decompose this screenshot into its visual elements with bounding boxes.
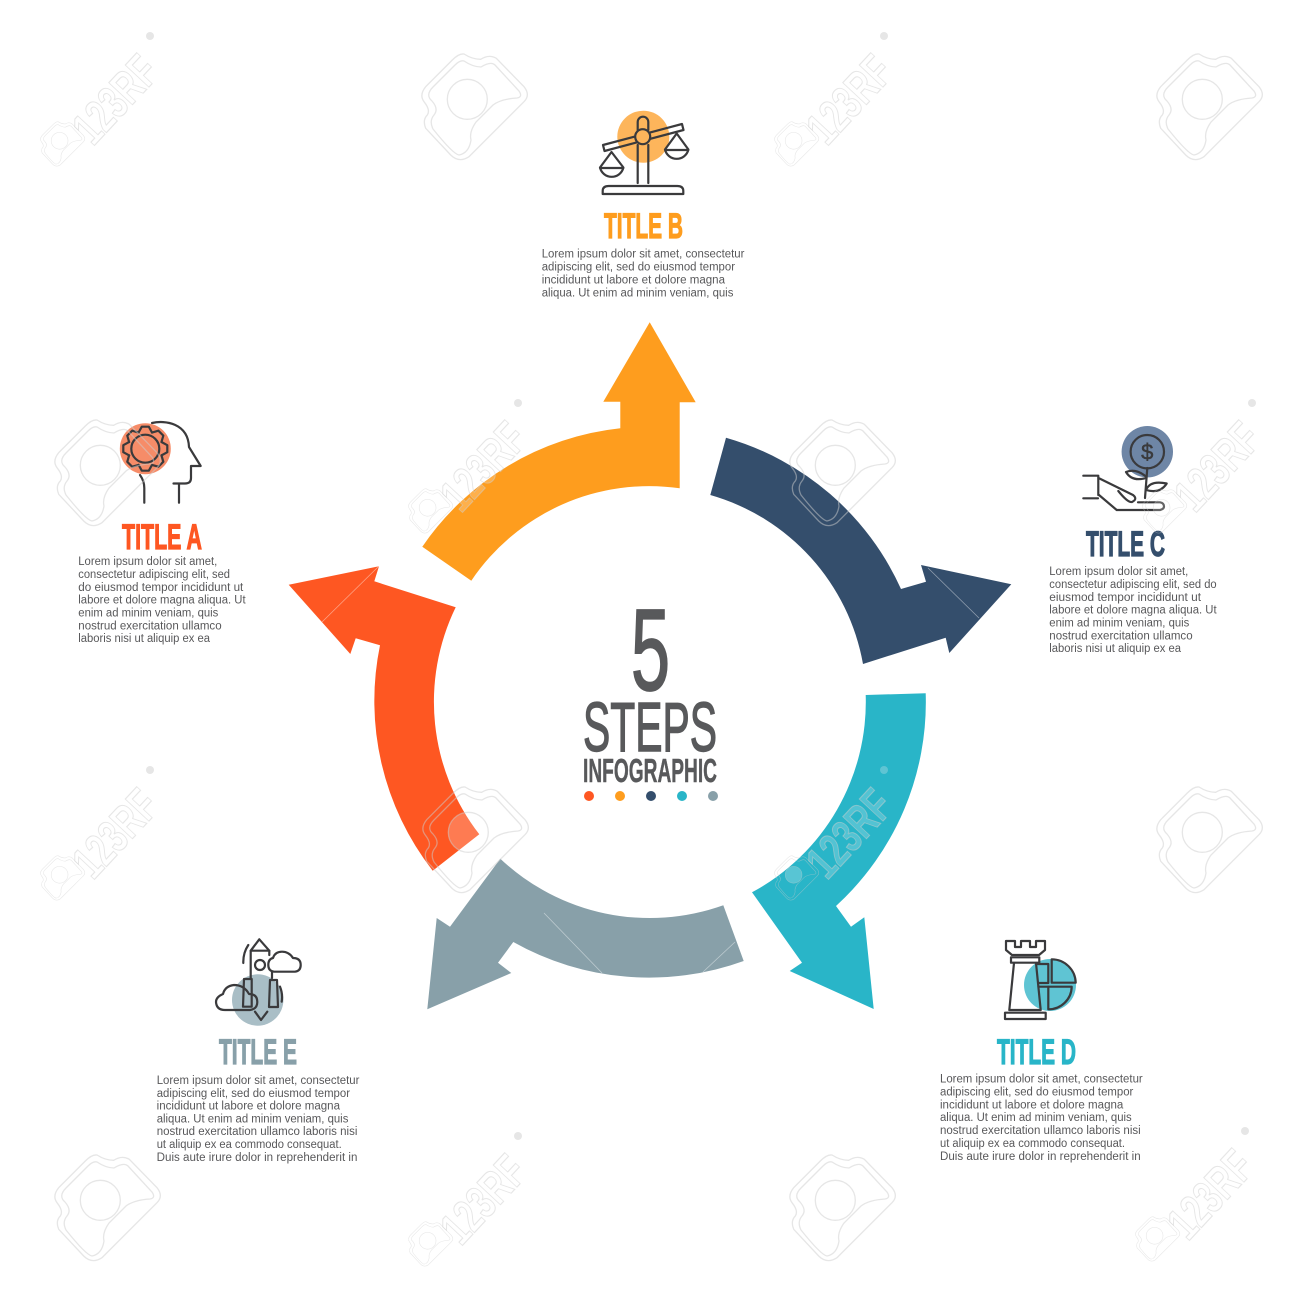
title B: TITLE B [604, 207, 683, 246]
watermark overlay: eggs and 123RF logos: 123RF [62, 779, 169, 888]
watermark overlay: eggs and 123RF logos: 123RF [1164, 412, 1271, 521]
watermark overlay: eggs and 123RF logos: 123RF [62, 45, 169, 154]
text block B: incididunt ut labore et dolore magna [542, 274, 726, 286]
text block A: do eiusmod tempor incididunt ut [78, 582, 244, 594]
text block D: adipiscing elit, sed do eiusmod tempor [940, 1086, 1133, 1098]
icon: chess rook with pie chart [1005, 941, 1076, 1019]
arrow: Title B orange [422, 322, 696, 581]
title E: TITLE E [219, 1033, 297, 1072]
word STEPS: STEPS [583, 688, 717, 766]
icon: head with gear [120, 422, 201, 503]
panel: Title B [542, 111, 745, 300]
icon: hand with coin plant [1083, 426, 1173, 510]
arrow: Title A red [289, 566, 479, 871]
text block A: laboris nisi ut aliquip ex ea [78, 633, 211, 645]
text block E: aliqua. Ut enim ad minim veniam, quis [157, 1113, 349, 1125]
text block C: enim ad minim veniam, quis [1049, 618, 1190, 630]
text block D: ut aliquip ex ea commodo consequat. [940, 1138, 1125, 1150]
text block A: enim ad minim veniam, quis [78, 608, 219, 620]
center heading: 5 steps infographic [583, 585, 717, 789]
text block A: consectetur adipiscing elit, sed [78, 569, 230, 581]
arrow: Title D cyan [752, 693, 926, 1009]
text block E: adipiscing elit, sed do eiusmod tempor [157, 1088, 350, 1100]
watermark overlay: eggs and 123RF logos: 123RF [1157, 1140, 1264, 1249]
text block E: Duis aute irure dolor in reprehenderit in [157, 1152, 357, 1164]
title D: TITLE D [997, 1033, 1076, 1072]
watermark overlay: eggs and 123RF logos: 123RF [796, 779, 903, 888]
word INFOGRAPHIC: INFOGRAPHIC [583, 752, 717, 789]
text block B [542, 248, 745, 300]
title A: TITLE A [122, 518, 202, 557]
text block E: ut aliquip ex ea commodo consequat. [157, 1139, 342, 1151]
text block B: aliqua. Ut enim ad minim veniam, quis [542, 288, 734, 300]
center colour dots [584, 791, 718, 801]
text block A: labore et dolore magna aliqua. Ut [78, 594, 246, 606]
watermark overlay: eggs and 123RF logos: 123RF [430, 412, 537, 521]
watermark overlay: eggs and 123RF logos: 123RF [796, 45, 903, 154]
text block B: Lorem ipsum dolor sit amet, consectetur [542, 248, 745, 260]
icon: scales [600, 111, 688, 194]
text block D: aliqua. Ut enim ad minim veniam, quis [940, 1112, 1132, 1124]
numeral 5: 5 [631, 585, 670, 715]
icon: rocket and clouds [216, 939, 301, 1026]
text block E: nostrud exercitation ullamco laboris nisi [157, 1126, 357, 1138]
text block C: consectetur adipiscing elit, sed do [1049, 579, 1217, 591]
panel: Title D [940, 941, 1143, 1163]
title C: TITLE C [1086, 525, 1165, 564]
text block C [1049, 566, 1217, 655]
text block A: nostrud exercitation ullamco [78, 620, 222, 632]
icon: hand with coin plant: $ [1141, 440, 1153, 464]
text block D: nostrud exercitation ullamco laboris nisi [940, 1125, 1141, 1137]
text block D [940, 1074, 1143, 1163]
text block D: Lorem ipsum dolor sit amet, consectetur [940, 1074, 1143, 1086]
text block D: incididunt ut labore et dolore magna [940, 1099, 1124, 1111]
text block A [78, 556, 246, 645]
text block C: Lorem ipsum dolor sit amet, [1049, 566, 1188, 578]
text block B: adipiscing elit, sed do eiusmod tempor [542, 262, 735, 274]
arrow: Title C navy [710, 438, 1011, 664]
text block C: eiusmod tempor incididunt ut [1049, 592, 1202, 604]
text block C: laboris nisi ut aliquip ex ea [1049, 643, 1182, 655]
text block E: incididunt ut labore et dolore magna [157, 1101, 341, 1113]
text block C: nostrud exercitation ullamco [1049, 630, 1193, 642]
text block A: Lorem ipsum dolor sit amet, [78, 556, 217, 568]
text block E [157, 1075, 360, 1164]
panel: Title C [1049, 426, 1217, 655]
watermark overlay: eggs and 123RF logos: 123RF [430, 1145, 537, 1254]
arrow: Title E grey [427, 859, 744, 1009]
text block D: Duis aute irure dolor in reprehenderit in [940, 1151, 1141, 1163]
text block E: Lorem ipsum dolor sit amet, consectetur [157, 1075, 360, 1087]
panel: Title A [78, 422, 246, 645]
panel: Title E [157, 939, 360, 1164]
text block C: labore et dolore magna aliqua. Ut [1049, 604, 1217, 616]
